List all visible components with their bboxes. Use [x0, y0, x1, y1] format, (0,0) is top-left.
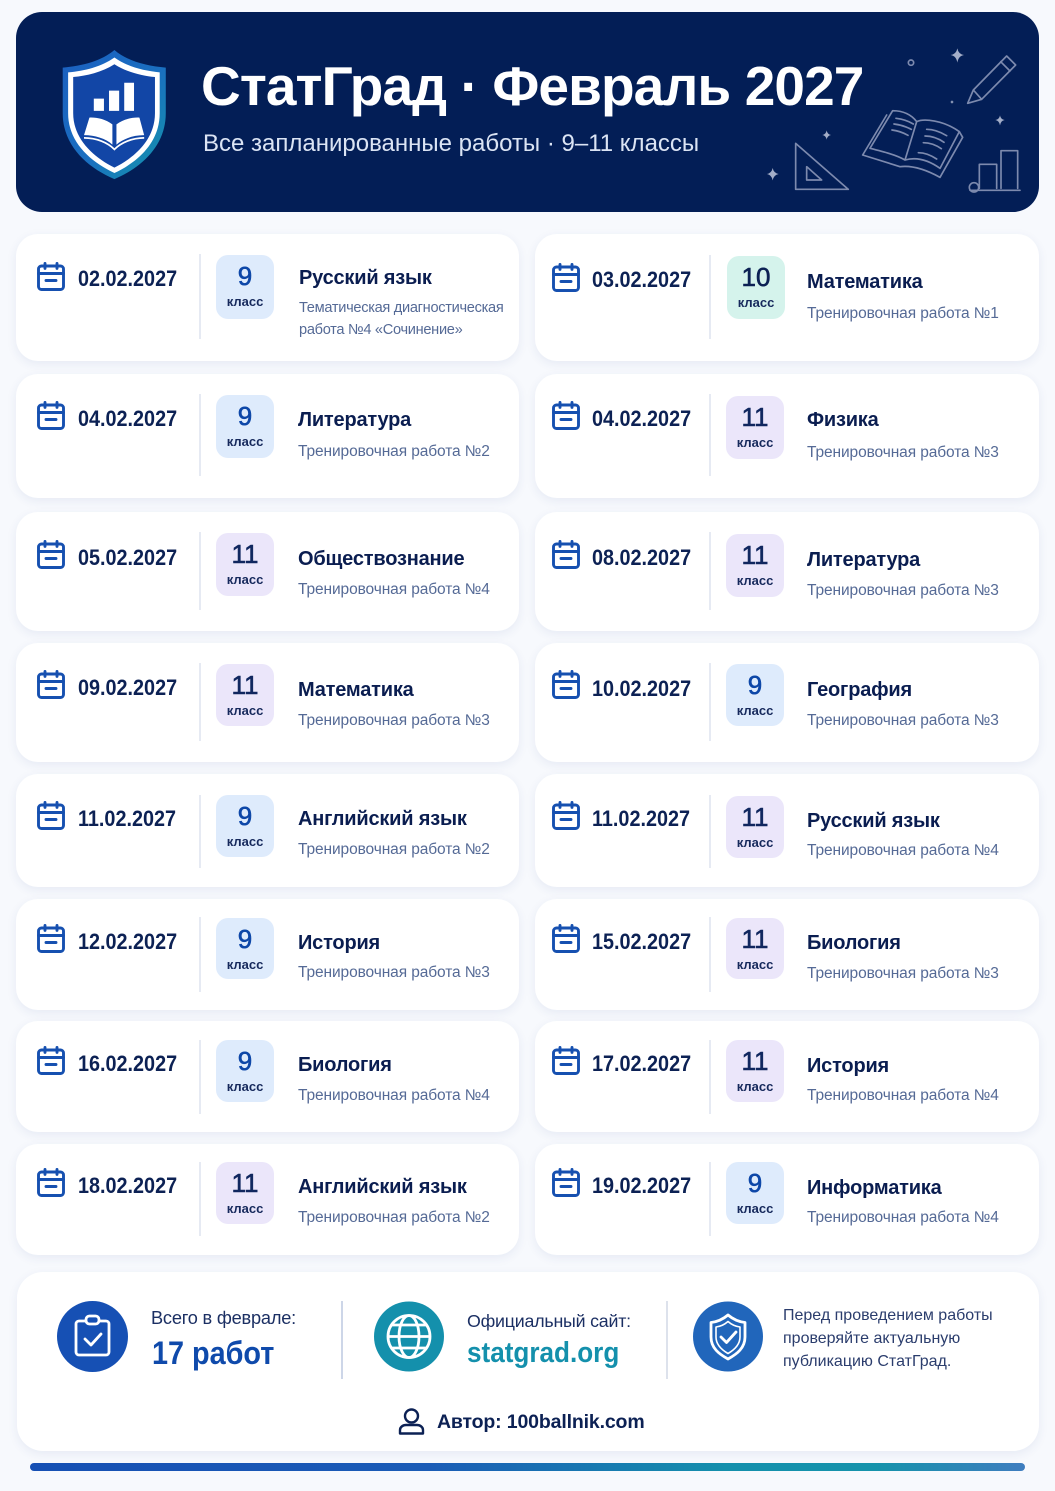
subject: Информатика	[807, 1177, 942, 1199]
total label: Всего в феврале:	[151, 1308, 296, 1328]
date: 11.02.2027	[592, 806, 690, 831]
grade badge	[727, 256, 785, 319]
grade badge: класс	[737, 957, 773, 972]
grade badge: класс	[737, 1079, 773, 1094]
work description: Тренировочная работа №3	[807, 965, 999, 982]
site label: Официальный сайт:	[467, 1311, 631, 1331]
icon: calendar	[37, 1046, 65, 1075]
grade badge: класс	[227, 957, 263, 972]
icon: shield logo	[62, 50, 166, 180]
card: 17.02.2027 История	[535, 1021, 1039, 1132]
date: 03.02.2027	[592, 267, 691, 292]
grade badge: класс	[737, 835, 773, 850]
grade badge	[726, 664, 784, 726]
card: 11.02.2027 Английский язык	[16, 774, 519, 887]
grade badge: класс	[227, 1079, 263, 1094]
grade badge	[726, 796, 784, 858]
icon: calendar	[552, 670, 580, 699]
date: 10.02.2027	[592, 676, 691, 701]
work description: Тренировочная работа №2	[298, 841, 490, 858]
work description: Тренировочная работа №3	[807, 712, 999, 729]
subject: Физика	[807, 409, 879, 431]
grade badge: класс	[227, 434, 263, 449]
grade badge	[726, 396, 784, 459]
date: 18.02.2027	[78, 1173, 177, 1198]
grade badge: 11	[742, 1046, 768, 1076]
grade badge: 9	[748, 670, 762, 700]
grade badge: 11	[742, 924, 768, 954]
icon: shield check	[693, 1302, 763, 1372]
card: 12.02.2027 История	[16, 899, 519, 1010]
grade badge: 9	[238, 801, 252, 831]
card: 05.02.2027 Обществознание	[16, 512, 519, 631]
grade badge: класс	[227, 572, 263, 587]
grade badge: класс	[737, 435, 773, 450]
grade badge	[216, 395, 274, 458]
date: 09.02.2027	[78, 675, 177, 700]
icon: calendar	[552, 1046, 580, 1075]
grade badge	[216, 1040, 274, 1102]
grade badge: 11	[742, 540, 768, 570]
date: 02.02.2027	[78, 266, 177, 291]
grade badge: класс	[227, 834, 263, 849]
card: 16.02.2027 Биология	[16, 1021, 519, 1132]
subject: Русский язык	[807, 810, 940, 832]
work description: Тренировочная работа №2	[298, 443, 490, 460]
subtitle: Все запланированные работы · 9–11 классы	[203, 130, 699, 157]
work description: Тренировочная работа №3	[807, 582, 999, 599]
icon: calendar	[552, 924, 580, 953]
subject: Биология	[298, 1054, 392, 1076]
note text: Перед проведением работы	[783, 1307, 993, 1324]
icon: calendar	[37, 801, 65, 830]
icon: calendar	[552, 801, 580, 830]
grade badge: 11	[742, 802, 768, 832]
icon: calendar	[37, 1168, 65, 1197]
date: 17.02.2027	[592, 1051, 691, 1076]
work description: Тренировочная работа №4	[807, 842, 999, 859]
grade badge	[216, 918, 274, 979]
grade badge	[726, 1162, 784, 1224]
icon: calendar	[37, 670, 65, 699]
subject: Английский язык	[298, 1176, 467, 1198]
card: 03.02.2027 Математика	[535, 234, 1039, 361]
grade badge: класс	[227, 1201, 263, 1216]
grade badge	[726, 1040, 784, 1102]
date: 05.02.2027	[78, 545, 177, 570]
work description: Тренировочная работа №4	[807, 1087, 999, 1104]
card: 18.02.2027 Английский язык	[16, 1144, 519, 1255]
work description: Тематическая диагностическая	[299, 300, 503, 316]
title: СтатГрад · Февраль 2027	[201, 55, 863, 117]
date: 16.02.2027	[78, 1051, 177, 1076]
work description	[299, 300, 503, 338]
grade badge: 10	[742, 262, 770, 292]
grade badge	[726, 918, 784, 979]
work description: Тренировочная работа №2	[298, 1209, 490, 1226]
grade badge	[216, 664, 274, 726]
subject: История	[298, 932, 380, 954]
work description: Тренировочная работа №1	[807, 305, 999, 322]
work description: Тренировочная работа №3	[298, 712, 490, 729]
subject: Английский язык	[298, 808, 467, 830]
icon: calendar	[552, 540, 580, 569]
icon: calendar	[37, 540, 65, 569]
work description: Тренировочная работа №4	[298, 1087, 490, 1104]
grade badge	[216, 255, 274, 319]
icon: globe	[374, 1302, 444, 1372]
card: 19.02.2027 Информатика	[535, 1144, 1039, 1255]
grade badge: класс	[737, 573, 773, 588]
work description: Тренировочная работа №3	[807, 444, 999, 461]
grade badge: класс	[227, 294, 263, 309]
subject: Обществознание	[298, 548, 464, 570]
date: 08.02.2027	[592, 545, 691, 570]
grade badge: 11	[232, 670, 258, 700]
card: 09.02.2027 Математика	[16, 643, 519, 762]
date: 15.02.2027	[592, 929, 691, 954]
card: 04.02.2027 Физика	[535, 374, 1039, 498]
work description: Тренировочная работа №4	[807, 1209, 999, 1226]
grade badge: 11	[232, 539, 258, 569]
grade badge: 9	[748, 1168, 762, 1198]
date: 04.02.2027	[592, 406, 691, 431]
grade badge: класс	[737, 703, 773, 718]
date: 19.02.2027	[592, 1173, 691, 1198]
icon: calendar	[37, 262, 65, 291]
grade badge	[726, 534, 784, 597]
work description: работа №4 «Сочинение»	[299, 322, 462, 338]
note text: проверяйте актуальную	[783, 1330, 960, 1347]
icon: calendar	[37, 401, 65, 430]
note text	[783, 1307, 993, 1370]
header banner	[16, 12, 1039, 212]
grade badge: 9	[238, 1046, 252, 1076]
card: 02.02.2027 Русский язык	[16, 234, 519, 361]
work description: Тренировочная работа №3	[298, 964, 490, 981]
grade badge	[216, 795, 274, 857]
grade badge: класс	[737, 1201, 773, 1216]
date: 12.02.2027	[78, 929, 177, 954]
subject: География	[807, 679, 912, 701]
date: 04.02.2027	[78, 406, 177, 431]
subject: Литература	[298, 409, 411, 431]
icon: calendar	[37, 924, 65, 953]
grade badge	[216, 1162, 274, 1224]
grade badge: 11	[742, 402, 768, 432]
grade badge	[216, 533, 274, 596]
subject: Математика	[807, 271, 923, 293]
card: 15.02.2027 Биология	[535, 899, 1039, 1010]
grade badge: 11	[232, 1168, 258, 1198]
card: 11.02.2027 Русский язык	[535, 774, 1039, 887]
grade badge: класс	[738, 295, 774, 310]
grade badge: 9	[238, 261, 252, 291]
card: 04.02.2027 Литература	[16, 374, 519, 498]
subject: Математика	[298, 679, 414, 701]
subject: История	[807, 1055, 889, 1077]
card: 10.02.2027 География	[535, 643, 1039, 762]
icon: clipboard	[57, 1301, 128, 1372]
icon: calendar	[552, 1168, 580, 1197]
site address: statgrad.org	[467, 1337, 619, 1369]
grade badge: 9	[238, 401, 252, 431]
gradient bottom bar	[30, 1463, 1025, 1471]
panel: footer summary	[17, 1272, 1039, 1451]
author: Автор: 100ballnik.com	[437, 1411, 645, 1433]
subject: Литература	[807, 549, 920, 571]
grade badge: 9	[238, 924, 252, 954]
subject: Русский язык	[299, 267, 432, 289]
subject: Биология	[807, 932, 901, 954]
icon: person	[398, 1408, 424, 1435]
icon: calendar	[552, 401, 580, 430]
date: 11.02.2027	[78, 806, 176, 831]
decorative icons: pencil, book, triangle, chart	[767, 48, 1021, 193]
icon: calendar	[552, 263, 580, 292]
note text: публикацию СтатГрад.	[783, 1353, 951, 1370]
grade badge: класс	[227, 703, 263, 718]
total value: 17 работ	[152, 1335, 274, 1371]
card: 08.02.2027 Литература	[535, 512, 1039, 631]
work description: Тренировочная работа №4	[298, 581, 490, 598]
